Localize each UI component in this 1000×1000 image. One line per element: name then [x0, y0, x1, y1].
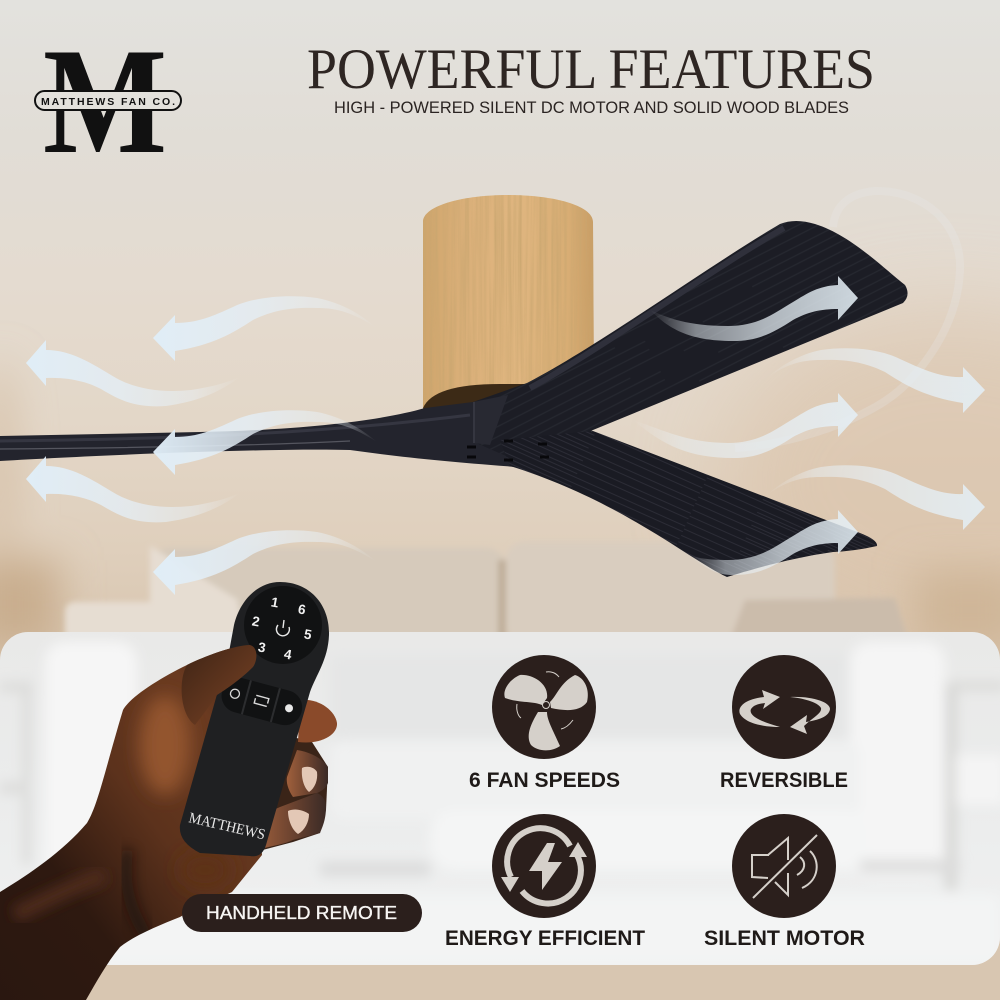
remote speed numbers: 4: [283, 646, 293, 663]
icon: muted speaker: [732, 814, 836, 918]
lower right blade: [500, 431, 877, 577]
ceiling fan: [0, 195, 908, 577]
hub with screws: [467, 395, 549, 460]
thumb: [182, 645, 256, 725]
left blade: [0, 402, 517, 467]
icon: fan: [492, 655, 596, 759]
arrow upper left inner: [153, 296, 377, 361]
blurred white sofa behind panel: [0, 642, 1000, 965]
remote speed numbers: 1: [270, 594, 280, 611]
remote speed numbers: 2: [251, 613, 261, 630]
fingers: [255, 700, 337, 852]
blurred room background: sofa and plant: [0, 360, 1000, 650]
remote brand text: MATTHEWS: [187, 810, 267, 843]
remote speed numbers: 6: [297, 601, 307, 618]
remote button disc: [244, 586, 322, 664]
title: POWERFUL FEATURES: [307, 38, 875, 101]
label: SILENT MOTOR: [704, 926, 865, 950]
fan mount: wood cylinder: [423, 195, 594, 420]
handheld remote label: [182, 894, 422, 932]
remote speed numbers: [251, 594, 313, 663]
remote power icon: [276, 620, 289, 636]
feature: energy efficient: [445, 814, 645, 950]
remote control: [180, 582, 329, 856]
subtitle: HIGH - POWERED SILENT DC MOTOR AND SOLID WOOD BLADES: [334, 99, 849, 117]
logo: Matthews Fan Co.: M: [43, 17, 167, 185]
handheld remote label: HANDHELD REMOTE: [206, 903, 397, 923]
faint curl upper right: [735, 191, 960, 448]
hand holding remote: [0, 582, 337, 1000]
arrow far right lower: [767, 465, 985, 530]
feature: reversible: [720, 655, 848, 792]
features panel: [0, 632, 1000, 965]
arrow on lower blade: [688, 510, 858, 575]
label: REVERSIBLE: [720, 768, 848, 792]
feature: silent motor: [704, 814, 865, 950]
airflow arrows: [26, 191, 985, 595]
label: ENERGY EFFICIENT: [445, 926, 645, 950]
hand and forearm: [0, 645, 262, 1000]
logo: Matthews Fan Co.: MATTHEWS FAN CO.: [41, 96, 175, 108]
arrow lower left inner: [153, 530, 377, 595]
arrow left outer lower: [26, 456, 240, 522]
arrow on upper blade: [650, 276, 858, 341]
icon: lightning with cycle arrows: [492, 814, 596, 918]
remote speed numbers: 5: [303, 626, 313, 643]
arrow left outer upper: [26, 340, 240, 406]
arrow centre left inner: [153, 410, 377, 475]
right wall shading: [720, 310, 1000, 650]
feature: 6 fan speeds: [469, 655, 620, 792]
arrow far right upper: [767, 348, 985, 413]
label: 6 FAN SPEEDS: [469, 768, 620, 792]
remote function buttons: [218, 674, 306, 729]
icon: rotation arrows: [732, 655, 836, 759]
arrow centre right: [633, 393, 858, 458]
remote speed numbers: 3: [257, 639, 267, 656]
upper right blade: [473, 221, 908, 462]
